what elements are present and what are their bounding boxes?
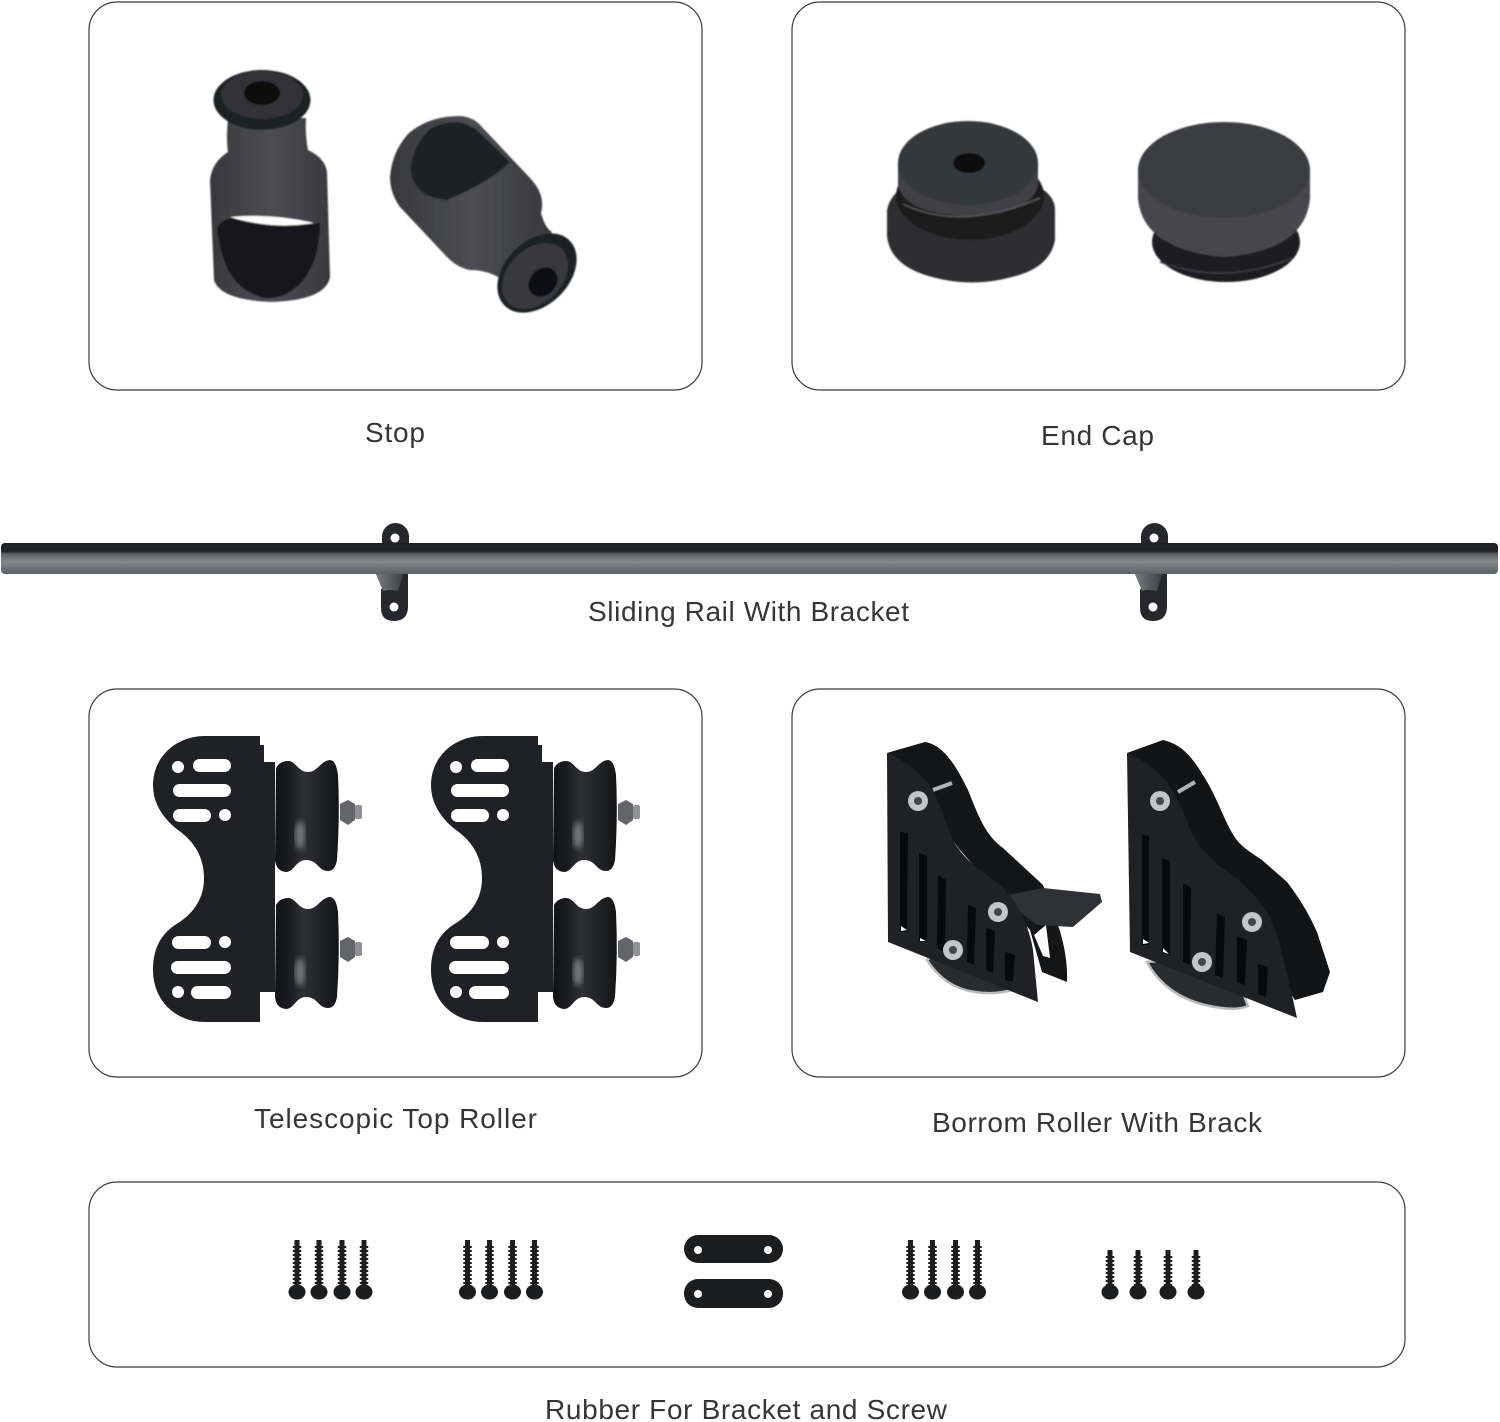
label: bottom roller: Borrom Roller With Brack — [932, 1107, 1263, 1138]
bracket plate — [153, 736, 275, 1022]
panel: end cap — [792, 2, 1405, 390]
icon: top roller 2 — [431, 736, 640, 1022]
label: sliding rail: Sliding Rail With Bracket — [588, 596, 909, 627]
label: stop: Stop — [365, 417, 425, 448]
icon: stop, upright — [210, 70, 330, 302]
icon: screw group 1 — [289, 1240, 372, 1299]
icon: bracket 2 — [1134, 523, 1168, 621]
lower wheel — [275, 897, 362, 1009]
rail — [1, 543, 1498, 574]
panel: telescopic top roller — [89, 689, 702, 1077]
icon: end cap closed — [1138, 122, 1310, 282]
icon: short screws — [1102, 1250, 1204, 1299]
icon: bottom roller closed — [1127, 740, 1330, 1018]
icon: end cap with hole — [887, 121, 1055, 282]
panel: bottom roller — [792, 689, 1405, 1077]
icon: rubber pads — [684, 1235, 783, 1308]
sliding rail with brackets — [1, 523, 1498, 621]
icon: bottom roller with handle — [887, 742, 1102, 1002]
icon: top roller 1 — [153, 736, 362, 1022]
panel: rubber and screws — [89, 1182, 1405, 1367]
icon: screw group 3 — [902, 1240, 986, 1299]
icon: bracket 1 — [375, 523, 409, 621]
panel: stop — [89, 2, 702, 390]
label: end cap: End Cap — [1041, 420, 1154, 451]
label: telescopic top roller: Telescopic Top Roller — [254, 1103, 537, 1134]
upper wheel — [275, 760, 362, 872]
icon: stop, tipped — [390, 116, 592, 328]
icon: screw group 2 — [460, 1240, 542, 1299]
